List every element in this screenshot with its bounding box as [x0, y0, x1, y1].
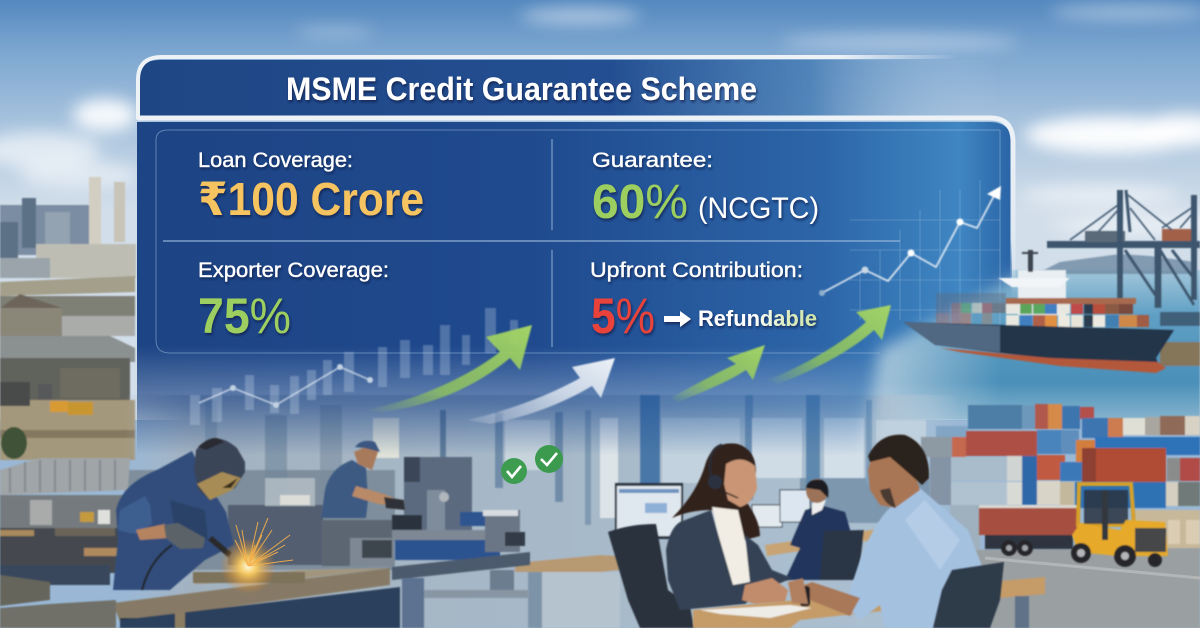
stat: guarantee: Guarantee:: [592, 149, 713, 172]
title: MSME Credit Guarantee Scheme: [286, 71, 757, 107]
panel white frame: [138, 57, 1013, 290]
forearm: [792, 582, 860, 616]
welding sparks: [220, 518, 293, 594]
hair: [868, 435, 929, 485]
ship red keel: [940, 348, 1166, 373]
office monitors and colleague: [615, 479, 885, 580]
stat: guarantee: 60%: [592, 176, 688, 229]
man in blue shirt: [788, 435, 984, 628]
port sea and harbour: [855, 189, 1200, 420]
sky: [0, 0, 1200, 420]
worker at lathe: [321, 441, 405, 518]
hands: [742, 578, 788, 604]
stat: loan coverage: Loan Coverage:: [198, 149, 353, 172]
truck with red container: [979, 505, 1079, 556]
green check badges: [501, 445, 563, 484]
stat: upfront contribution: [590, 259, 817, 344]
stat: upfront contribution: Refundable: [698, 306, 817, 331]
stat: guarantee: [592, 149, 819, 229]
distant shore: [1040, 254, 1195, 274]
stat: exporter coverage: Exporter Coverage:: [198, 259, 389, 282]
bench front: [0, 568, 400, 628]
back chair: [820, 530, 864, 580]
green growth arrow 3: [767, 305, 891, 384]
panel header band: [137, 60, 1000, 116]
headset: [710, 445, 722, 478]
shirt: [845, 488, 984, 628]
white growth arrow: [468, 358, 615, 424]
front desk: [693, 577, 1045, 628]
stacked shipping containers: [921, 404, 1200, 551]
colleague head: [806, 479, 828, 503]
rising line chart right: [819, 186, 1001, 296]
chimney left: [89, 177, 101, 247]
stat: loan coverage: [198, 149, 424, 225]
stat: exporter coverage: 75%: [198, 288, 291, 344]
face: [724, 459, 757, 507]
side desk: [515, 555, 620, 572]
yellow forklift: [1071, 484, 1168, 567]
chimney right: [114, 182, 125, 242]
green growth arrow 1: [365, 325, 532, 412]
main blue panel: [137, 122, 1012, 455]
white shirt: [712, 507, 754, 588]
back monitors: [752, 490, 810, 527]
green growth arrow 2: [670, 345, 765, 402]
cranes: [1047, 190, 1200, 308]
stat: upfront contribution: 5%: [591, 288, 655, 344]
ship containers: [936, 293, 1149, 327]
left monitor: [615, 483, 683, 539]
colleague jacket: [785, 505, 853, 580]
ship superstructure: [1018, 270, 1066, 315]
stat: upfront contribution: Upfront Contribution:: [590, 259, 803, 282]
jacket: [666, 510, 792, 610]
ship hull: [903, 322, 1174, 368]
factory skyline left: [0, 177, 136, 460]
watch: [800, 586, 810, 606]
lathe machine: [322, 457, 530, 628]
woman with headset: [608, 443, 792, 628]
office background: [125, 395, 960, 628]
yard ground: [950, 548, 1200, 628]
back desk: [765, 528, 885, 556]
clouds: [0, 4, 1200, 235]
inner stat frame: [156, 130, 1000, 353]
welding helmet: [194, 438, 245, 500]
stat: loan coverage: ₹100 Crore: [198, 173, 424, 225]
welder body: [113, 451, 234, 590]
chart grid right: [850, 180, 1000, 320]
sea: [855, 270, 1200, 420]
machine shop back wall: [228, 478, 323, 565]
welder: [113, 438, 245, 590]
tree: [1, 427, 27, 459]
lower-left shed: [0, 458, 130, 606]
neck and face: [868, 455, 920, 508]
welder forearm and glove: [136, 524, 168, 540]
hand: [788, 578, 808, 604]
stat: exporter coverage: [198, 259, 389, 344]
yellow crates: [50, 401, 93, 415]
hair: [672, 443, 760, 540]
right chair: [933, 562, 1004, 628]
cargo ship: [903, 250, 1174, 373]
stat: guarantee: (NCGTC): [698, 192, 819, 225]
panel-bottom candlestick chart: [190, 308, 518, 425]
stat grid dividers: [163, 139, 900, 347]
left chair: [608, 524, 694, 628]
panel-bottom line chart: [199, 364, 373, 408]
panel body fill: [137, 122, 1012, 455]
dock: [1160, 342, 1200, 366]
